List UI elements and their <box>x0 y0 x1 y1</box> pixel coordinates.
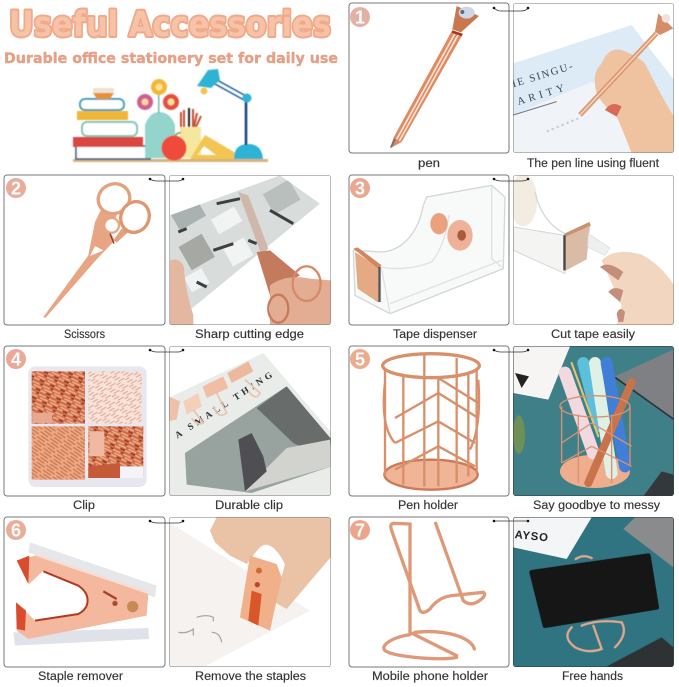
number badge 3: 3 <box>355 178 365 198</box>
panel: free hands photo <box>513 517 674 667</box>
wire pen holder product <box>383 353 479 490</box>
panel: durable clip photo <box>168 346 332 498</box>
holder wires <box>567 556 624 651</box>
number badge 1: 1 <box>355 8 365 28</box>
pencil cup <box>180 108 201 158</box>
removed staples <box>178 616 222 642</box>
title: Useful Accessories <box>9 5 331 45</box>
number badge 6: 6 <box>11 520 21 540</box>
left thumb <box>170 259 193 325</box>
caption: pen line: The pen line using fluent <box>527 158 660 170</box>
caption: tape dispenser: Tape dispenser <box>393 329 477 341</box>
panel: scissors cutting photo <box>169 175 331 325</box>
panel: pen writing photo <box>511 3 674 153</box>
panel: clips <box>4 346 165 496</box>
number badge 3 <box>350 178 370 198</box>
vase with flowers <box>137 79 179 158</box>
magazine photo <box>185 386 332 493</box>
laptop <box>623 517 673 567</box>
panel: cutting tape photo <box>509 174 674 325</box>
clip box product <box>28 366 147 487</box>
pen in hand <box>580 13 673 115</box>
holder base <box>560 455 630 488</box>
caption: mobile phone holder: Mobile phone holder <box>372 671 488 683</box>
plant <box>513 415 525 454</box>
keyboard <box>605 637 673 667</box>
number badge 7: 7 <box>355 520 365 540</box>
phone <box>532 556 657 626</box>
pen product <box>390 6 479 148</box>
paper sheet <box>514 25 674 116</box>
wire phone holder product <box>384 523 485 659</box>
binder clip decoration row 3 right <box>494 350 528 352</box>
illustration: desk with books, flowers, apple and lamp <box>73 69 268 162</box>
hand <box>595 49 674 153</box>
magazine title: A SMALL THING <box>174 370 275 441</box>
caption: pen: pen <box>418 158 440 170</box>
hand <box>210 517 331 609</box>
panel: phone holder <box>349 517 509 667</box>
magazine page <box>168 353 332 498</box>
binder clip decoration row 4 left <box>150 521 183 523</box>
caption: clip: Clip <box>73 500 95 512</box>
staple remover product <box>13 542 157 646</box>
number badge 6 <box>6 520 26 540</box>
binder clip decoration row 4 right <box>494 520 528 522</box>
caption: cut tape easily: Cut tape easily <box>551 329 635 341</box>
printed words: IE SINGU- <box>511 61 575 90</box>
caption: staple remover: Staple remover <box>38 671 123 683</box>
holder wires <box>560 396 632 483</box>
shelf <box>73 159 268 162</box>
binder clips <box>168 361 260 424</box>
panel: pen holder <box>349 346 509 496</box>
caption: remove the staples: Remove the staples <box>195 671 306 683</box>
panel: removing staples photo <box>169 517 331 669</box>
tape roll <box>514 176 538 226</box>
number badge 1 <box>350 7 370 28</box>
white box <box>513 517 592 559</box>
pens <box>565 363 632 483</box>
number badge 4: 4 <box>11 350 21 370</box>
dispenser end <box>513 192 591 274</box>
paper <box>169 522 310 669</box>
title: Useful Accessories <box>9 5 331 45</box>
panel: free hands photo: AYSO <box>514 529 549 544</box>
scissors product <box>43 179 154 318</box>
scissors in hand <box>238 192 300 295</box>
caption: scissors: Scissors <box>64 329 105 341</box>
caption: free hands: Free hands <box>562 671 623 683</box>
panel: tape dispenser <box>349 175 509 325</box>
number badge 4 <box>6 349 26 370</box>
scribbled line <box>547 118 578 132</box>
tape strip <box>588 234 610 255</box>
caption: sharp cutting edge: Sharp cutting edge <box>195 329 304 341</box>
number badge 5: 5 <box>355 350 365 370</box>
binder clip end dots <box>149 7 529 522</box>
white box <box>513 346 570 400</box>
set square <box>190 135 246 159</box>
panel: scissors <box>4 175 165 325</box>
binder clip decoration row 2 left <box>150 179 183 181</box>
laptop <box>615 350 673 418</box>
caption: say goodbye: Say goodbye to messy <box>533 500 660 512</box>
number badge 5 <box>350 349 370 370</box>
panel: pen holder in use photo <box>513 346 674 496</box>
keyboard <box>643 471 673 496</box>
right hand <box>270 277 331 325</box>
printed paper <box>170 175 320 309</box>
printed words: ARITY <box>516 83 567 108</box>
binder clip decoration row 3 left <box>150 350 183 352</box>
printed words <box>514 64 572 105</box>
number badge 2 <box>6 178 26 198</box>
hand <box>602 252 674 325</box>
panel: pen <box>349 3 509 153</box>
panel: staple remover <box>4 517 165 667</box>
tape dispenser product <box>353 185 505 314</box>
number badge 2: 2 <box>11 178 21 198</box>
apple <box>162 133 186 160</box>
subtitle: Durable office stationery set for daily use <box>4 51 338 67</box>
desk lamp <box>197 69 263 159</box>
stack of books <box>73 88 150 159</box>
binder clip decoration row 1 <box>494 8 528 11</box>
binder clip decoration row 2 right <box>494 179 528 181</box>
number badge 7 <box>350 520 370 540</box>
caption: pen holder: Pen holder <box>398 500 458 512</box>
caption: durable clip: Durable clip <box>215 500 283 512</box>
remover in hand <box>240 556 282 631</box>
